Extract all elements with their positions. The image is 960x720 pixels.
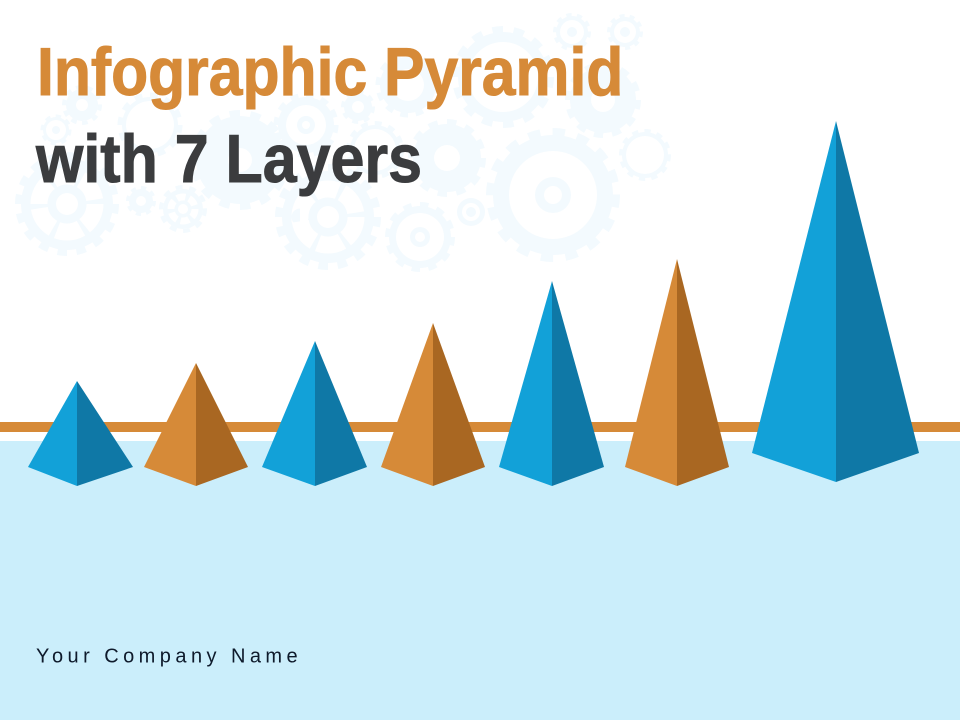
- pyramid 3: [262, 341, 367, 486]
- light blue lower panel: [0, 441, 960, 720]
- pyramid 1: [28, 381, 133, 486]
- background gears watermark: [19, 15, 669, 269]
- title line 2: with 7 Layers: [35, 121, 422, 197]
- pyramid 7: [752, 121, 919, 482]
- company name: Your Company Name: [36, 646, 302, 668]
- pyramid 5: [499, 281, 604, 486]
- pyramid 4: [381, 323, 485, 486]
- pyramid 6: [625, 259, 729, 486]
- pyramid 2: [144, 363, 248, 486]
- orange horizontal band: [0, 422, 960, 432]
- title line 1: Infographic Pyramid: [37, 34, 623, 110]
